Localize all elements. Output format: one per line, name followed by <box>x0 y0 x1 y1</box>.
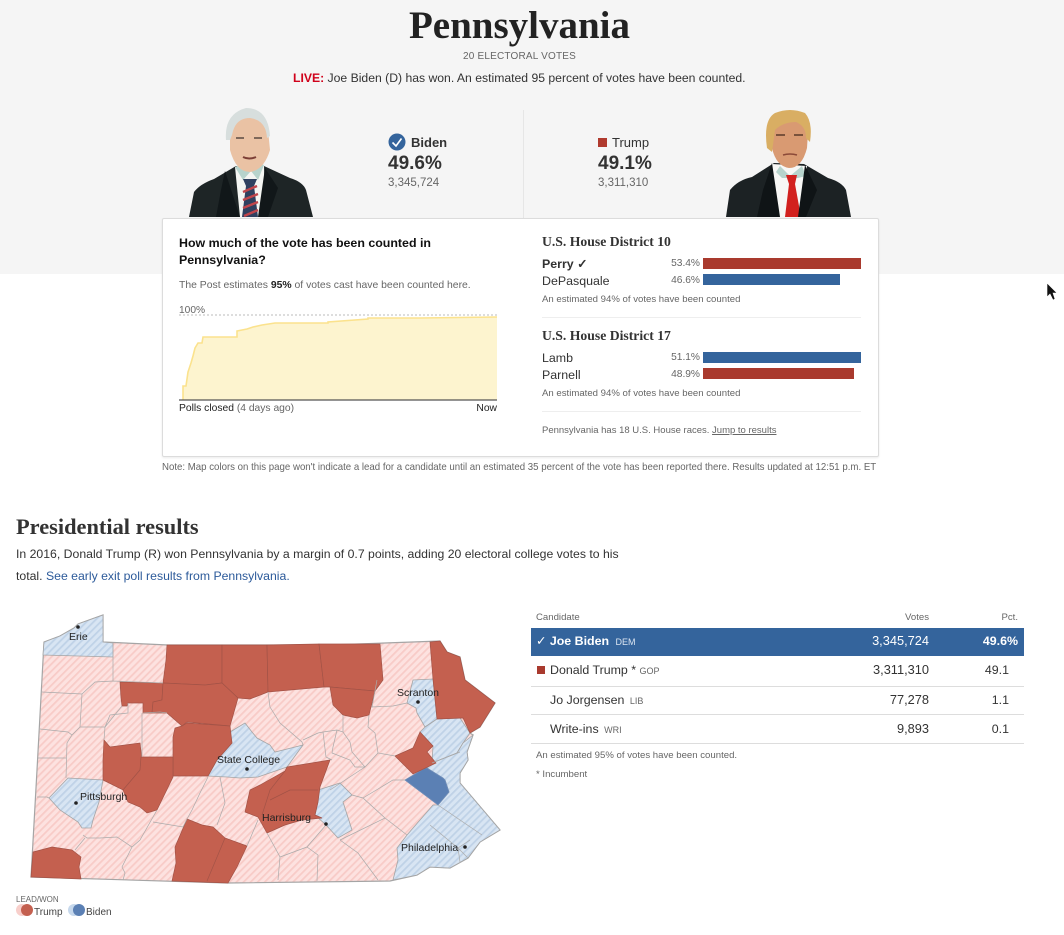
city labels: Pittsburgh <box>80 791 127 803</box>
city labels: State College <box>217 754 280 766</box>
DePasquale percent: 46.6% <box>671 275 700 286</box>
row: Donald Trump: 49.1 <box>985 663 1009 677</box>
row: Jo Jorgensen: Jo Jorgensen LIB <box>550 693 643 707</box>
title: Pennsylvania <box>409 4 630 47</box>
map legend: LEAD/WON <box>16 895 59 904</box>
card heading: How much of the vote has been counted in Pennsylvania? <box>179 236 431 267</box>
section intro text: In 2016, Donald Trump (R) won Pennsylvania by a margin of 0.7 points, adding 20 electoral college votes to his total. See early exit poll results from Pennsylvania. <box>16 547 619 583</box>
House District 17 heading: U.S. House District 17 <box>542 328 671 343</box>
Perry bar <box>703 258 861 269</box>
Perry name: Perry ✓ <box>542 257 588 271</box>
city labels: Harrisburg <box>262 812 311 824</box>
Trump won counties <box>31 641 495 883</box>
DePasquale bar <box>703 274 840 285</box>
row: Write-ins: 9,893 <box>897 721 929 736</box>
Trump percent: 49.1% <box>598 153 652 174</box>
state outline base <box>31 615 500 883</box>
Lamb name: Lamb <box>542 351 573 365</box>
row: Joe Biden: ✓ Joe Biden DEM <box>536 634 636 648</box>
DePasquale name: DePasquale <box>542 274 610 288</box>
row: Jo Jorgensen: 1.1 <box>992 693 1009 707</box>
District 10 counted note: An estimated 94% of votes have been counted <box>542 294 740 305</box>
Biden won county <box>405 768 449 805</box>
incumbent footnote: * Incumbent <box>536 769 587 780</box>
Biden votes: 3,345,724 <box>388 177 439 189</box>
table counted note: An estimated 95% of votes have been counted. <box>536 750 737 761</box>
Trump name: Trump <box>612 135 649 150</box>
Parnell bar <box>703 368 854 379</box>
city labels: Philadelphia <box>401 842 458 854</box>
electoral votes subtitle: 20 ELECTORAL VOTES <box>463 51 576 62</box>
panel: vote count and house races card <box>162 218 879 457</box>
Lamb percent: 51.1% <box>671 352 700 363</box>
chart: votes counted over time: Now <box>476 403 498 414</box>
city labels: Erie <box>69 631 88 643</box>
map legend: Biden <box>86 907 112 918</box>
county boundary lines <box>37 657 482 881</box>
results table <box>531 612 1024 780</box>
row: Joe Biden <box>531 628 1024 656</box>
Perry percent: 53.4% <box>671 258 700 269</box>
Trump votes: 3,311,310 <box>598 177 648 189</box>
house races link line: Pennsylvania has 18 U.S. House races. Jump to results <box>542 425 776 436</box>
city labels: Scranton <box>397 687 439 699</box>
chart: votes counted over time: 100% <box>179 305 205 316</box>
map legend: Trump <box>34 907 63 918</box>
row: Donald Trump <box>531 656 1024 687</box>
row: Joe Biden: 49.6% <box>983 634 1018 648</box>
row: Write-ins: Write-ins WRI <box>550 722 622 736</box>
Parnell percent: 48.9% <box>671 369 700 380</box>
live status line: LIVE: Joe Biden (D) has won. An estimated 95 percent of votes have been counted. <box>293 71 746 85</box>
Lamb bar <box>703 352 861 363</box>
candidate divider <box>523 110 524 218</box>
card estimate text: The Post estimates 95% of votes cast have been counted here. <box>179 280 471 291</box>
chart: votes counted over time: Polls closed (4 days ago) <box>179 403 294 414</box>
Biden name: Biden <box>411 135 447 150</box>
row: Joe Biden: 3,345,724 <box>872 633 929 648</box>
table header candidate: Candidate <box>536 612 580 623</box>
House District 10 heading: U.S. House District 10 <box>542 234 671 249</box>
row: Write-ins: 0.1 <box>992 722 1009 736</box>
map colors note: Note: Map colors on this page won't indicate a lead for a candidate until an estimated 35 percent of the vote has been reported there. Results updated at 12:51 p.m. ET <box>162 462 876 473</box>
Parnell name: Parnell <box>542 368 581 382</box>
District 17 counted note: An estimated 94% of votes have been counted <box>542 388 740 399</box>
divider <box>542 411 861 412</box>
row: Write-ins <box>531 715 1024 744</box>
Biden percent: 49.6% <box>388 153 442 174</box>
section heading: Presidential results: Presidential results <box>16 514 199 539</box>
row: Jo Jorgensen: 77,278 <box>890 692 929 707</box>
row: Donald Trump: Donald Trump * GOP <box>550 663 660 677</box>
Biden leading counties <box>43 615 500 880</box>
row: Jo Jorgensen <box>531 686 1024 715</box>
table header votes: Votes <box>905 612 929 623</box>
table header percent: Pct. <box>1001 612 1018 623</box>
header background <box>0 0 1064 274</box>
row: Donald Trump: 3,311,310 <box>873 662 929 677</box>
Trump color key <box>598 138 607 147</box>
city labels <box>69 625 467 854</box>
divider <box>542 317 861 318</box>
